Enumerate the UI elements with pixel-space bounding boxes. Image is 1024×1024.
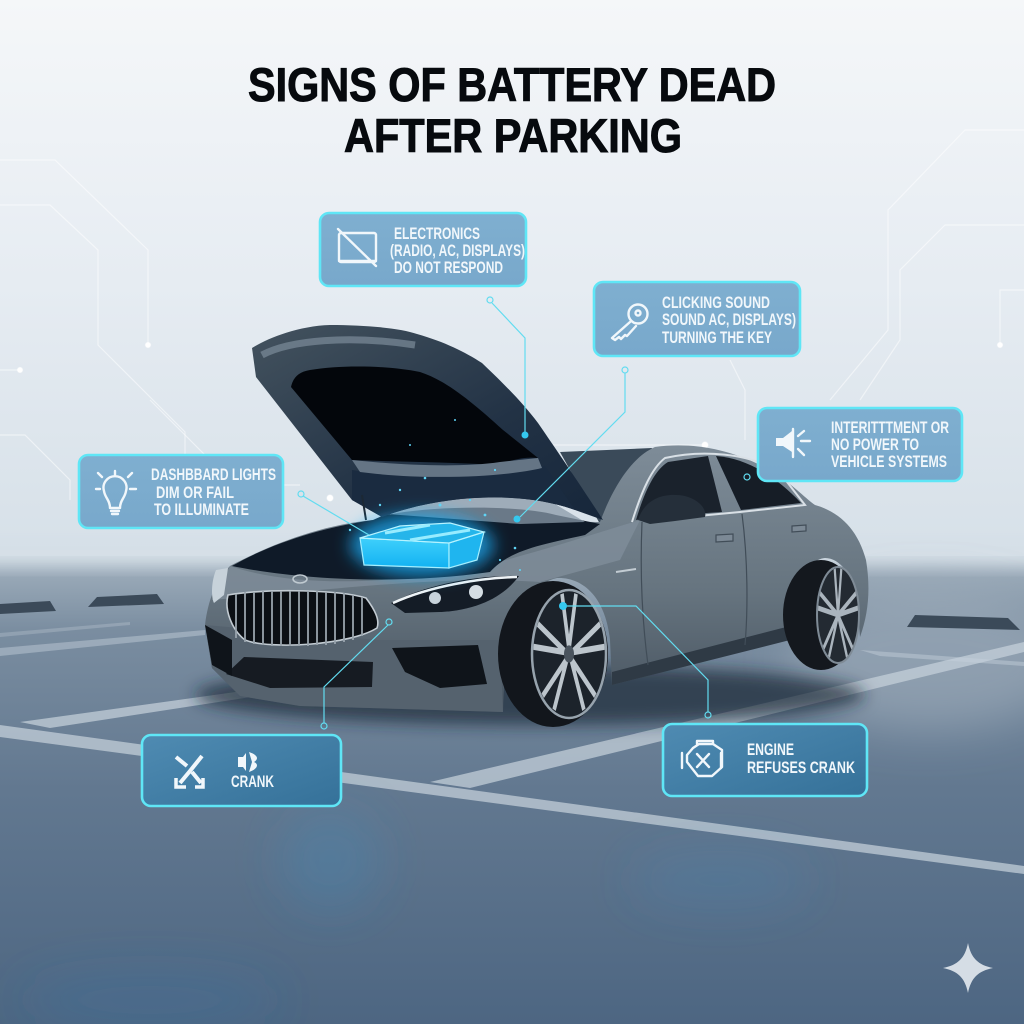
front wheel [498,581,608,727]
leader: electronics [487,297,528,438]
leader lines [298,297,750,729]
intermittent power text: VEHICLE SYSTEMS [831,452,947,471]
car shadow [195,665,865,725]
background sky [0,0,1024,565]
leader: crank [321,619,392,729]
door lines and handles [616,514,806,665]
intermittent power text [831,418,949,471]
front grille [227,591,378,646]
leader: dashboard lights [298,491,369,535]
lower front bumper [205,625,503,712]
title: SIGNS OF BATTERY DEAD [248,58,776,111]
lower air intakes [205,625,487,688]
car [195,325,868,727]
side mirror [638,495,705,524]
windshield behind hood [560,448,652,524]
badge [293,575,307,583]
background circuit lines [0,130,1024,501]
callout: dashboard lights [79,455,283,528]
leader: engine [559,602,711,718]
intermittent power text: NO POWER TO [831,435,919,454]
electronics text [390,224,525,277]
engine text: REFUSES CRANK [747,758,856,777]
dashboard lights text [151,465,276,519]
engine text [747,740,856,777]
dashboard lights text: DASHBBARD LIGHTS [151,465,276,484]
callout: intermittent power [758,408,962,481]
leader: power [744,474,750,480]
glass behind engine bay [387,493,585,524]
crank text: CRANK [231,772,275,791]
intermittent power text: INTERITTTMENT OR [831,418,949,437]
icon: crossed arrows [176,756,203,787]
leader: clicking sound [514,367,628,522]
floor light patch [790,590,1024,730]
clicking sound text: SOUND AC, DISPLAYS) [662,310,796,329]
parking lot floor [0,556,1024,1024]
callout: engine refuses crank [663,724,867,796]
floor blue reflections [20,810,810,1024]
floor markings [0,622,1024,874]
battery glow [350,513,494,577]
callout: electronics [320,213,526,286]
horizon haze [0,540,1024,566]
sparks [349,419,521,571]
callout: clicking sound [594,282,800,356]
engine bay [232,508,600,580]
hood gas strut [362,495,366,520]
car body shell [205,445,868,712]
side sill [612,626,790,685]
dashboard lights text: TO ILLUMINATE [154,500,249,519]
callout: crank [142,735,341,806]
clicking sound text: CLICKING SOUND [662,293,770,312]
icon: light bulb [96,471,136,514]
wheel stops [0,594,1020,630]
rear wheel [783,560,859,670]
electronics text: ELECTRONICS [394,224,480,243]
open hood [252,325,603,520]
icon: engine with x [682,741,722,776]
glowing battery [360,523,484,568]
clicking sound text [662,293,796,347]
upper body highlight [212,520,640,600]
headlight [391,576,519,613]
electronics text: (RADIO, AC, DISPLAYS) [390,241,525,260]
electronics text: DO NOT RESPOND [394,258,503,277]
icon: key [612,304,648,340]
clicking sound text: TURNING THE KEY [662,328,772,347]
dashboard lights text: DIM OR FAIL [156,483,234,502]
title [248,58,776,162]
icon: sparkle watermark [943,943,993,993]
side windows [632,454,805,522]
icon: display off [338,229,376,266]
icon: speaker [776,429,810,457]
engine text: ENGINE [747,740,794,759]
left headlight [212,568,228,603]
icon: split speaker [238,752,257,772]
title: AFTER PARKING [344,109,682,162]
